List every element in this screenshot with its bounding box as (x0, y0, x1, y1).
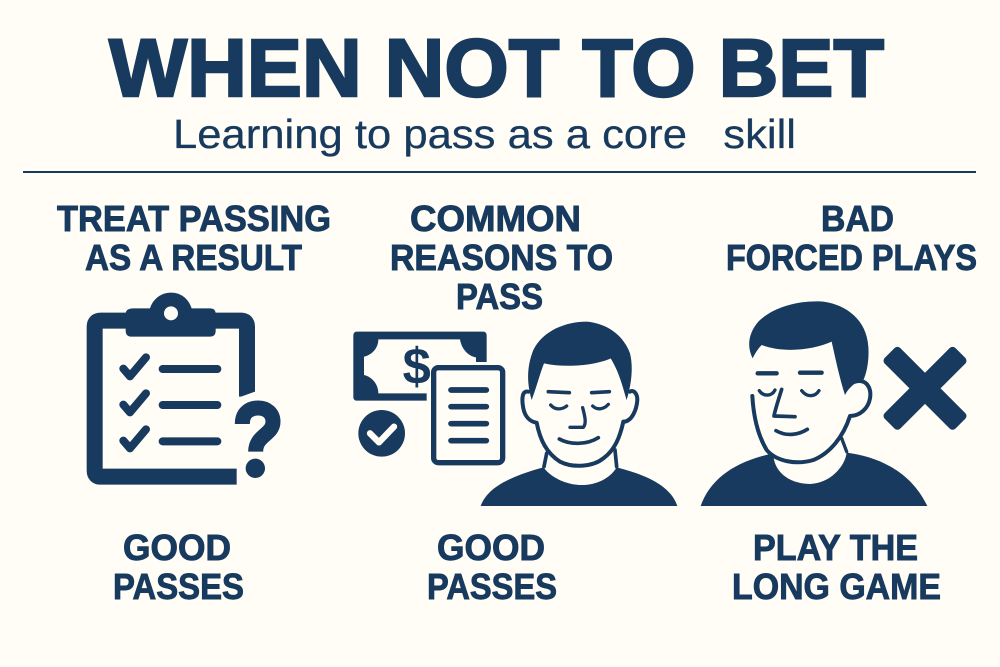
caption: good passes (middle): GOOD (437, 527, 545, 568)
banknote: $ (403, 337, 431, 394)
heading: bad forced plays (726, 198, 977, 278)
caption: play the long game (732, 527, 941, 607)
heading: treat passing as a result: TREAT PASSING (57, 198, 331, 239)
caption: good passes (left) (113, 527, 244, 607)
person with closed eyes (481, 322, 677, 506)
caption: play the long game: PLAY THE (753, 527, 918, 568)
icon: clipboard with checklist and question mark (95, 293, 273, 478)
caption: good passes (middle): PASSES (427, 566, 557, 607)
heading: common reasons to pass: PASS (456, 276, 543, 317)
heading: treat passing as a result (57, 198, 331, 278)
banknote (353, 332, 490, 404)
caption: good passes (left): PASSES (113, 566, 244, 607)
caption: play the long game: LONG GAME (732, 566, 941, 607)
icon: money, document and check (353, 322, 677, 506)
icon: person with x mark (701, 301, 968, 506)
heading: bad forced plays: BAD (821, 198, 894, 239)
heading: bad forced plays: FORCED PLAYS (726, 237, 977, 278)
title: WHEN NOT TO BET (109, 23, 884, 114)
caption: good passes (middle) (427, 527, 557, 607)
check badge (358, 410, 405, 457)
caption: good passes (left): GOOD (123, 527, 231, 568)
subtitle: Learning to pass as a core skill (173, 111, 796, 157)
heading: common reasons to pass (390, 198, 613, 317)
heading: common reasons to pass: COMMON (410, 198, 581, 239)
heading: common reasons to pass: REASONS TO (390, 237, 613, 278)
person with closed eyes (701, 301, 927, 506)
x mark (882, 345, 968, 431)
document (434, 368, 503, 463)
heading: treat passing as a result: AS A RESULT (85, 237, 302, 278)
